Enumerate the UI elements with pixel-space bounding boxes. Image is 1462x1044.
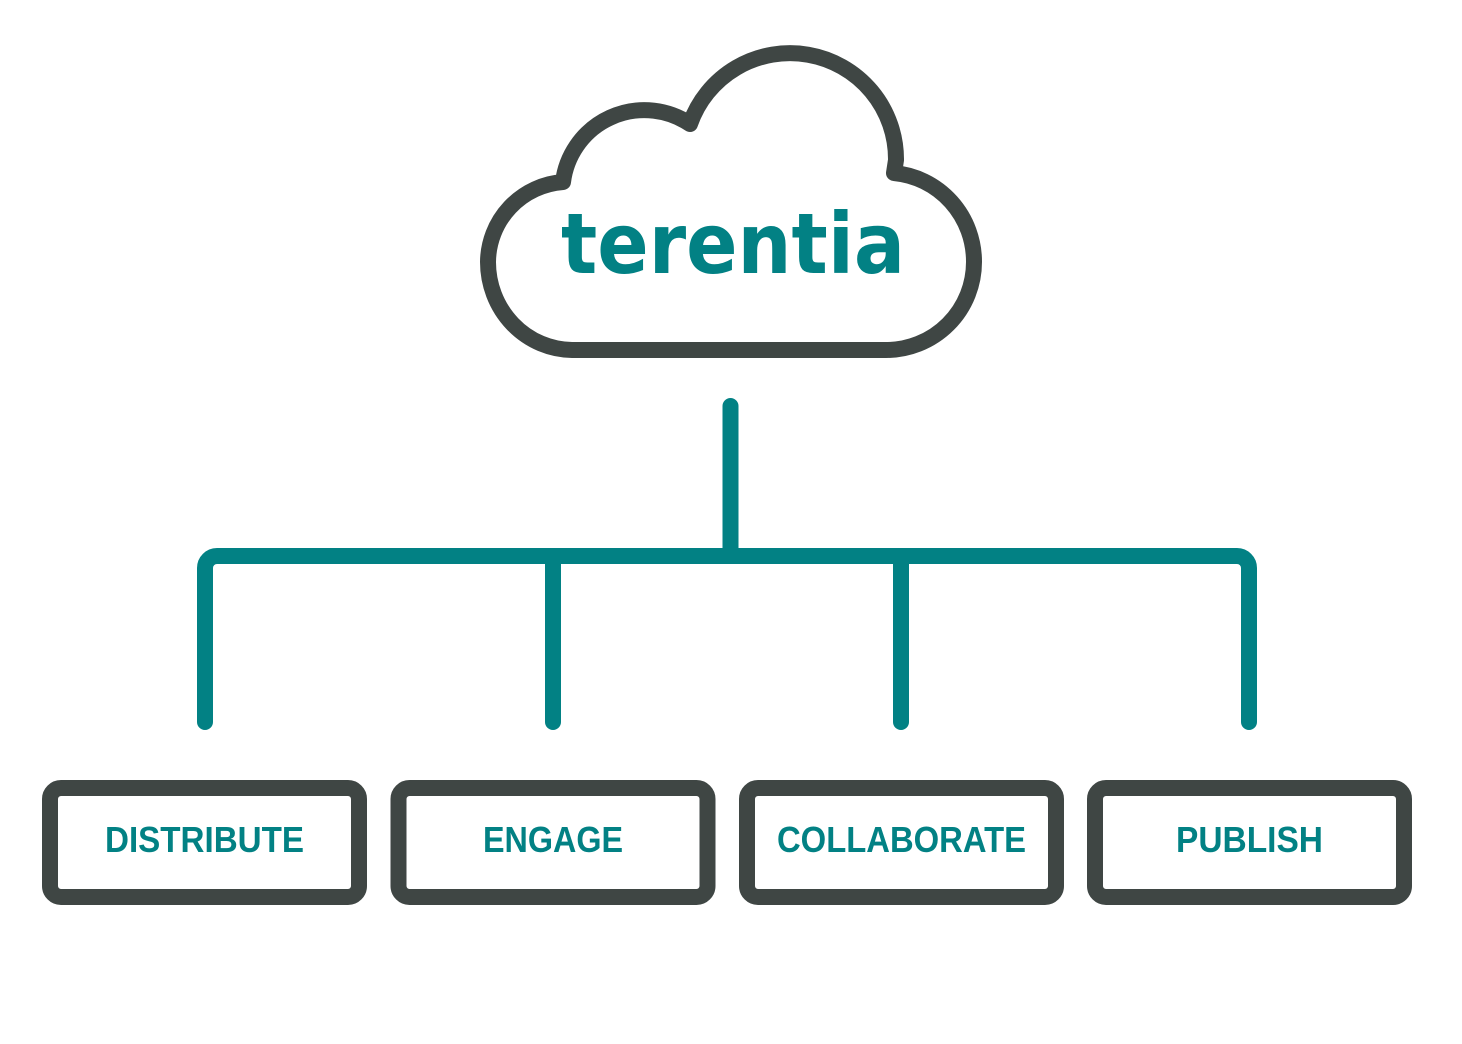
connector tree bbox=[205, 406, 1249, 722]
box: distribute: DISTRIBUTE bbox=[105, 819, 304, 860]
box: publish bbox=[1095, 788, 1404, 897]
logo wordmark: terentia bbox=[561, 195, 905, 293]
box: collaborate bbox=[747, 788, 1056, 897]
box: distribute bbox=[50, 788, 359, 897]
box: collaborate: COLLABORATE bbox=[777, 819, 1026, 860]
box: engage: ENGAGE bbox=[483, 819, 623, 860]
icon: cloud with terentia logo bbox=[488, 53, 974, 350]
box: publish: PUBLISH bbox=[1176, 819, 1323, 860]
box: engage bbox=[398, 788, 708, 897]
